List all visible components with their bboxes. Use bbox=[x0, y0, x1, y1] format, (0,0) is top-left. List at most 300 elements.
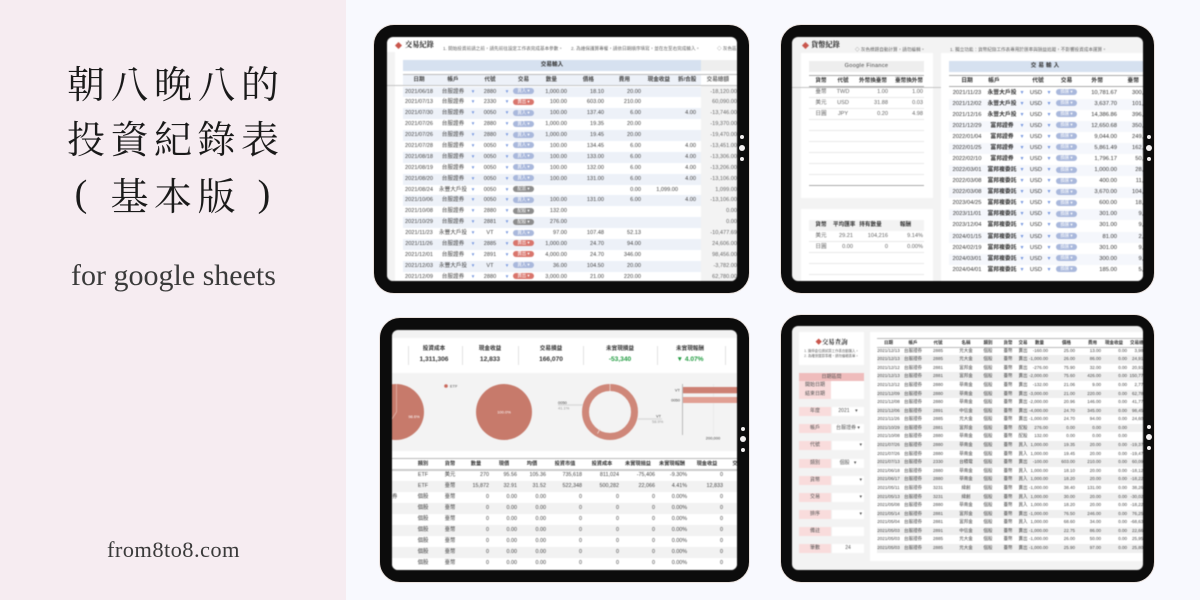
transaction table: 132.00 bbox=[587, 165, 604, 171]
transaction table: ▾ bbox=[1048, 134, 1050, 140]
transaction table: ▾ bbox=[472, 165, 474, 171]
transaction table: ▾ bbox=[1048, 189, 1050, 195]
results table: 買入 bbox=[1018, 494, 1028, 499]
panel: holdings bbox=[801, 209, 933, 281]
results table: 2021/05/14 bbox=[877, 511, 900, 516]
transaction table: ▾ bbox=[472, 230, 474, 236]
transaction table: 2021/08/20 bbox=[405, 176, 433, 182]
transaction table: 買入 bbox=[517, 132, 526, 137]
transaction table: 1,000.00 bbox=[545, 241, 567, 247]
transaction table: 2021/08/24 bbox=[405, 187, 433, 193]
white table area bbox=[392, 451, 737, 570]
results table: 0.00 bbox=[1118, 382, 1127, 387]
results table: 18.10 bbox=[1064, 468, 1075, 473]
results table: 賣出 bbox=[1018, 536, 1028, 541]
results table: 台服證券 bbox=[904, 528, 922, 533]
holdings table: 0 bbox=[652, 494, 655, 500]
transaction table: 1,000.00 bbox=[1094, 167, 1117, 173]
results table: 0.00 bbox=[1118, 519, 1127, 524]
results table: 臺幣 bbox=[1004, 365, 1012, 370]
results header: 代號 bbox=[934, 340, 942, 345]
transaction table: 買入 bbox=[517, 110, 526, 115]
chart: donut bbox=[558, 384, 664, 436]
holdings table: 0.00% bbox=[907, 244, 923, 250]
title: line 2: 紀 bbox=[154, 109, 192, 164]
transaction table: 2021/07/13 bbox=[405, 99, 433, 105]
results table: 個股 bbox=[984, 536, 992, 541]
transaction table: USD bbox=[1030, 123, 1042, 129]
transaction table: 0050 bbox=[484, 176, 496, 182]
transaction table: 20.00 bbox=[627, 132, 641, 138]
transaction table: 2021/10/08 bbox=[405, 208, 433, 214]
transaction table: USD bbox=[1030, 167, 1042, 173]
tablet: transaction record bbox=[373, 24, 750, 294]
results table: 台服證券 bbox=[904, 373, 922, 378]
transaction table: ▾ bbox=[506, 176, 508, 182]
results table: 富邦金 bbox=[959, 365, 973, 370]
results table: 0.00 bbox=[1118, 425, 1127, 430]
transaction table: 富邦證券 bbox=[990, 134, 1014, 140]
transaction table: 6.00 bbox=[630, 110, 641, 116]
transaction table: 換匯 bbox=[1060, 155, 1069, 160]
results table: 富邦金 bbox=[959, 511, 973, 516]
left panel: title block bbox=[0, 0, 346, 600]
notes bbox=[804, 348, 859, 358]
transaction table: 1,796.17 bbox=[1094, 156, 1117, 162]
results table: 24.70 bbox=[1064, 416, 1075, 421]
results table: 25.00 bbox=[1064, 348, 1075, 353]
filter: date range: 結束日期 bbox=[805, 391, 825, 397]
holdings table: 0 bbox=[720, 560, 723, 566]
holdings table: 貨幣 bbox=[815, 222, 827, 228]
results table: 34.00 bbox=[1090, 519, 1101, 524]
transaction table: 富邦證券 bbox=[990, 156, 1014, 162]
transaction table: -13,106.00 bbox=[710, 197, 737, 203]
results table: 中信金 bbox=[959, 408, 973, 413]
results table: 86.00 bbox=[1090, 528, 1101, 533]
results table: 台服證券 bbox=[904, 425, 922, 430]
results table: 個股 bbox=[984, 459, 992, 464]
transaction table: 4,000.00 bbox=[545, 252, 567, 258]
results table: 2021/11/26 bbox=[877, 416, 900, 421]
results table: 2021/05/04 bbox=[877, 519, 900, 524]
transaction table: 100.00 bbox=[550, 154, 567, 160]
transaction table: ▾ bbox=[472, 219, 474, 225]
transaction table: ▾ bbox=[506, 121, 508, 127]
transaction table: 0050 bbox=[484, 143, 496, 149]
transaction table: 300.00 bbox=[1099, 256, 1117, 262]
transaction table: ▾ bbox=[472, 274, 474, 280]
holdings table: 0.00% bbox=[672, 538, 687, 544]
transaction table: 換匯 bbox=[1060, 122, 1069, 127]
transaction table: 4.00 bbox=[685, 176, 696, 182]
results table: 26.00 bbox=[1064, 356, 1075, 361]
results header: 費用 bbox=[1088, 340, 1097, 345]
transaction table: USD bbox=[1030, 156, 1042, 162]
results table: 68.60 bbox=[1064, 519, 1075, 524]
transaction table: 1,000.00 bbox=[545, 88, 567, 94]
holdings table: 0 bbox=[720, 504, 723, 510]
holdings table: 0 bbox=[720, 472, 723, 478]
results table: 0.00 bbox=[1118, 373, 1127, 378]
results table: 2021/12/13 bbox=[877, 356, 900, 361]
results table: 緯創 bbox=[962, 485, 970, 490]
results table: 345.00 bbox=[1087, 408, 1101, 413]
holdings table: 0.00 bbox=[506, 516, 517, 522]
results table: 買入 bbox=[1018, 476, 1028, 481]
title: line 3 bbox=[75, 166, 270, 221]
title: line 2: 表 bbox=[241, 109, 279, 164]
transaction table: 換匯 bbox=[1060, 233, 1069, 238]
transaction table: 5,861.49 bbox=[1094, 145, 1117, 151]
transaction table: 100.00 bbox=[550, 176, 567, 182]
transaction table: 0050 bbox=[484, 165, 496, 171]
chart: donut: 58.9% bbox=[652, 419, 664, 424]
transaction table: 富邦證券 bbox=[990, 145, 1014, 151]
results table: 賣出 bbox=[1018, 528, 1028, 533]
transaction table: ▾ bbox=[506, 208, 508, 214]
transaction table: 2024/02/19 bbox=[952, 245, 982, 251]
filter: sort: 排序 bbox=[810, 511, 820, 517]
results table: -1,000.00 bbox=[1029, 536, 1048, 541]
results table: 台服證券 bbox=[904, 502, 922, 507]
holdings table: 個股 bbox=[418, 548, 428, 554]
holdings table: 美元 bbox=[815, 233, 827, 239]
transaction table: 2021/12/29 bbox=[952, 123, 982, 129]
holdings table: 0 bbox=[486, 516, 489, 522]
holdings table: 臺幣 bbox=[445, 560, 455, 566]
results table: 2880 bbox=[933, 451, 943, 456]
results table: 賣出 bbox=[1018, 416, 1028, 421]
camera dots: tablet 3 bbox=[740, 427, 746, 452]
results table: 2880 bbox=[933, 433, 943, 438]
results table: 76.50 bbox=[1064, 511, 1075, 516]
results table: 買入 bbox=[1018, 519, 1028, 524]
results table: 2021/12/13 bbox=[877, 348, 900, 353]
results table: 2021/12/12 bbox=[877, 382, 900, 387]
holdings table: 美元 bbox=[445, 472, 455, 478]
filter: account: 台服證券 ▾ bbox=[836, 425, 860, 431]
holdings table: 0.00% bbox=[672, 504, 687, 510]
results table: 0.00 bbox=[1118, 433, 1127, 438]
table header: 均價 bbox=[527, 461, 537, 467]
tablet: transaction query bbox=[780, 314, 1155, 583]
transaction table: VT bbox=[486, 230, 494, 236]
transaction header: 帳戶 bbox=[988, 78, 1000, 84]
transaction table: 永豐大戶投 bbox=[988, 90, 1016, 96]
transaction table: ▾ bbox=[472, 88, 474, 94]
rate table header bbox=[808, 76, 924, 88]
screen: transaction query bbox=[792, 326, 1143, 570]
results table: 131.00 bbox=[1087, 485, 1101, 490]
results table: 2021/12/09 bbox=[877, 391, 900, 396]
rate table: 31.88 bbox=[874, 100, 888, 106]
transaction table: -13,451.00 bbox=[710, 143, 737, 149]
results table: 臺幣 bbox=[1004, 348, 1012, 353]
holdings table: 0.00% bbox=[672, 560, 687, 566]
chart: pie 1 bbox=[368, 384, 424, 440]
transaction table: 0050 bbox=[484, 110, 496, 116]
transaction table: USD bbox=[1030, 267, 1042, 273]
chart: horizontal bars: 0050 bbox=[671, 398, 681, 402]
results table: -1,000.00 bbox=[1029, 416, 1048, 421]
results table: 臺幣 bbox=[1004, 425, 1012, 430]
results table: 2021/10/08 bbox=[877, 433, 900, 438]
results table: 0.00 bbox=[1066, 433, 1075, 438]
results table: 20.00 bbox=[1090, 451, 1101, 456]
transaction table: ▾ bbox=[1048, 245, 1050, 251]
transaction table: 100.00 bbox=[550, 143, 567, 149]
results table: 2021/12/12 bbox=[877, 365, 900, 370]
holdings table: 臺幣 bbox=[445, 482, 455, 488]
chart: horizontal bars bbox=[671, 384, 737, 440]
transaction table: 0.00 bbox=[726, 219, 737, 225]
filter: account: 帳戶 bbox=[810, 425, 820, 431]
results table: 2880 bbox=[933, 502, 943, 507]
header rule bbox=[949, 75, 1143, 76]
results table: 1,000.00 bbox=[1030, 468, 1048, 473]
transaction table: 富邦複委託 bbox=[988, 245, 1016, 251]
results table: 個股 bbox=[984, 348, 992, 353]
transaction table: ▾ bbox=[506, 154, 508, 160]
results table: 94.00 bbox=[1090, 416, 1101, 421]
results table: 0.00 bbox=[1118, 468, 1127, 473]
header rule bbox=[392, 458, 737, 459]
transaction table: 98,456.00 bbox=[712, 252, 737, 258]
tablet: currency record bbox=[780, 24, 1155, 294]
stat: unrealized return: ▼ 4.07% bbox=[676, 356, 704, 363]
transaction table: 換匯 bbox=[1060, 100, 1069, 105]
holdings table: 0 bbox=[486, 538, 489, 544]
transaction table: 賣出 bbox=[517, 240, 526, 245]
transaction table: 台服證券 bbox=[442, 241, 464, 247]
transaction table: 2885 bbox=[484, 241, 496, 247]
results table: -1,000.00 bbox=[1029, 528, 1048, 533]
transaction table: 133.00 bbox=[587, 154, 604, 160]
transaction table: ▾ bbox=[1021, 267, 1023, 273]
holdings table: 0.00 bbox=[536, 494, 546, 500]
results table: 台服證券 bbox=[904, 519, 922, 524]
results table: 2021/12/08 bbox=[877, 399, 900, 404]
results table: 華南金 bbox=[959, 433, 973, 438]
results table: 3231 bbox=[933, 494, 943, 499]
stat: unrealized gain bbox=[606, 344, 634, 363]
results table: 臺幣 bbox=[1004, 408, 1012, 413]
holdings table: 臺幣 bbox=[445, 526, 455, 532]
holdings table: 0.00 bbox=[536, 504, 546, 510]
results header: 日期 bbox=[884, 340, 893, 345]
holdings table: 0.00 bbox=[536, 526, 546, 532]
filter: date range bbox=[799, 373, 864, 399]
transaction table: 1,000.00 bbox=[545, 121, 567, 127]
transaction table: ▾ bbox=[1021, 222, 1023, 228]
results table: 個股 bbox=[984, 519, 992, 524]
results table: -160.00 bbox=[1033, 348, 1048, 353]
transaction table: 94.00 bbox=[627, 241, 641, 247]
left strip bbox=[387, 52, 395, 281]
holdings table: 0 bbox=[486, 560, 489, 566]
transaction table: 21.00 bbox=[590, 274, 604, 280]
transaction table: ▾ bbox=[506, 274, 508, 280]
transaction table: 2880 bbox=[484, 88, 496, 94]
transaction header: 交易 bbox=[1061, 78, 1072, 84]
heading: 貨幣紀錄 bbox=[811, 40, 840, 50]
transaction table: -18,120.00 bbox=[710, 88, 737, 94]
filter: note bbox=[799, 526, 864, 536]
transaction table: ▾ bbox=[506, 187, 508, 193]
transaction table: 14,386.86 bbox=[1091, 112, 1117, 118]
holdings table: -9.30% bbox=[670, 472, 687, 478]
transaction table: 301.00 bbox=[1099, 211, 1117, 217]
results table: 緯創 bbox=[962, 494, 970, 499]
holdings table: 0 bbox=[720, 526, 723, 532]
results table: 元大金 bbox=[959, 348, 973, 353]
results table: 2021/12/06 bbox=[877, 408, 900, 413]
table header: 現金收益 bbox=[697, 461, 717, 467]
holdings table: 0 bbox=[616, 538, 619, 544]
transaction table: 3,637.70 bbox=[1094, 101, 1117, 107]
transaction table: ▾ bbox=[506, 230, 508, 236]
transaction table bbox=[950, 88, 1144, 273]
results table: -1,000.00 bbox=[1029, 356, 1048, 361]
results table: 50.00 bbox=[1090, 536, 1101, 541]
results table: 2021/05/03 bbox=[877, 536, 900, 541]
results table: 富邦金 bbox=[959, 519, 973, 524]
transaction table: ▾ bbox=[472, 110, 474, 116]
results table: 2880 bbox=[933, 382, 943, 387]
results header: 價格 bbox=[1062, 340, 1071, 345]
results table: 2881 bbox=[933, 373, 943, 378]
transaction table: 2021/12/09 bbox=[405, 274, 433, 280]
notes: 1. 選停倉位請試算工作表自動匯入。 bbox=[804, 349, 859, 353]
stat: cash income bbox=[478, 344, 502, 363]
results table: 9.00 bbox=[1092, 382, 1101, 387]
transaction table: 2021/07/28 bbox=[405, 143, 433, 149]
results table: 富邦金 bbox=[959, 373, 973, 378]
holdings table: 0 bbox=[616, 526, 619, 532]
transaction table: 買入 bbox=[517, 262, 526, 267]
results table: 2885 bbox=[933, 348, 943, 353]
title: line 2: 錄 bbox=[197, 109, 236, 164]
transaction table: 0050 bbox=[484, 154, 496, 160]
results table: 臺幣 bbox=[1004, 485, 1012, 490]
results table: 華南金 bbox=[959, 502, 973, 507]
results table: 0.00 bbox=[1118, 485, 1127, 490]
transaction table: 6.00 bbox=[630, 154, 641, 160]
chart: pie 2 bbox=[476, 384, 532, 440]
results table: -1,000.00 bbox=[1029, 485, 1048, 490]
results table: 0.00 bbox=[1118, 476, 1127, 481]
results table: 13.00 bbox=[1090, 348, 1101, 353]
note 1: ◇ 灰色標題自動計算，請勿編輯。 bbox=[855, 47, 925, 52]
holdings table: 持有數量 bbox=[859, 222, 882, 228]
results table: 元大金 bbox=[959, 545, 973, 550]
transaction table: ▾ bbox=[1048, 156, 1050, 162]
transaction table: ▾ bbox=[506, 197, 508, 203]
transaction table: ▾ bbox=[1048, 200, 1050, 206]
holdings table: 0.00 bbox=[506, 548, 517, 554]
transaction table: ▾ bbox=[506, 88, 508, 94]
title: line 3: ) bbox=[258, 173, 270, 215]
holdings table: 臺幣 bbox=[445, 516, 455, 522]
results table: 個股 bbox=[984, 382, 992, 387]
holdings table: 0 bbox=[720, 494, 723, 500]
transaction table: ▾ bbox=[1021, 256, 1023, 262]
charts bbox=[391, 383, 738, 441]
results table: 2885 bbox=[933, 536, 943, 541]
transaction table: 301.00 bbox=[1099, 245, 1117, 251]
stat: invested cost: 投資成本 bbox=[423, 346, 445, 352]
filter: year bbox=[799, 406, 864, 416]
results table: 買入 bbox=[1018, 502, 1028, 507]
transaction table: 富邦複委託 bbox=[988, 222, 1016, 228]
filter: trade bbox=[799, 492, 864, 502]
results table: 1,000.00 bbox=[1030, 494, 1048, 499]
holdings table: 9.14% bbox=[907, 233, 923, 239]
results table: 個股 bbox=[984, 511, 992, 516]
transaction table: USD bbox=[1030, 101, 1042, 107]
results table: 3231 bbox=[933, 485, 943, 490]
rate table: 美元 bbox=[815, 100, 827, 106]
transaction table: ▾ bbox=[1048, 101, 1050, 107]
transaction table: 台服證券 bbox=[442, 197, 464, 203]
table header: 數量 bbox=[471, 461, 481, 467]
title: line 1: 晚 bbox=[154, 54, 192, 109]
holdings table: 0.00% bbox=[672, 516, 687, 522]
results table: 0.00 bbox=[1118, 536, 1127, 541]
transaction table: 換匯 bbox=[1060, 244, 1069, 249]
freeze line bbox=[792, 86, 941, 88]
transaction table: 台服證券 bbox=[442, 99, 464, 105]
results table: 2021/10/29 bbox=[877, 425, 900, 430]
table header: 未實現報酬 bbox=[659, 461, 685, 467]
results table: 臺幣 bbox=[1004, 433, 1012, 438]
transaction table: 276.00 bbox=[550, 219, 567, 225]
transaction table: 換匯 bbox=[1060, 189, 1069, 194]
band: Google Finance: Google Finance bbox=[845, 63, 888, 69]
results table: 2021/12/13 bbox=[877, 373, 900, 378]
transaction table: USD bbox=[1030, 145, 1042, 151]
transaction table: 2880 bbox=[484, 121, 496, 127]
transaction table: 18.10 bbox=[590, 88, 604, 94]
results table: 台服證券 bbox=[904, 416, 922, 421]
transaction table: 81.00 bbox=[1102, 234, 1117, 240]
transaction table: ▾ bbox=[1048, 234, 1050, 240]
results table: 220.00 bbox=[1087, 391, 1101, 396]
transaction table: -13,106.00 bbox=[710, 176, 737, 182]
transaction table: 富邦複委託 bbox=[988, 200, 1016, 206]
transaction table: -19,370.00 bbox=[710, 121, 737, 127]
chart: horizontal bars: 200,000 bbox=[706, 436, 721, 440]
transaction table: 配息 bbox=[517, 186, 526, 191]
holdings table: 0 bbox=[486, 526, 489, 532]
results table: 富邦金 bbox=[959, 425, 973, 430]
transaction table: ▾ bbox=[1021, 167, 1023, 173]
results table: 賣出 bbox=[1018, 356, 1028, 361]
title: line 3: 本 bbox=[154, 166, 192, 221]
results table: 20.00 bbox=[1090, 442, 1101, 447]
holdings table: -75,406 bbox=[637, 472, 655, 478]
transaction table: 131.00 bbox=[587, 197, 604, 203]
rate table: 臺幣 bbox=[815, 89, 827, 95]
results table: 臺幣 bbox=[1004, 373, 1012, 378]
transaction table: 2021/07/26 bbox=[405, 132, 433, 138]
screen: dashboard bbox=[392, 330, 737, 570]
transaction table: 2021/08/18 bbox=[405, 154, 433, 160]
filter: count: 筆數 bbox=[810, 545, 820, 551]
results table: 0.00 bbox=[1118, 391, 1127, 396]
holdings table: 15,872 bbox=[472, 482, 489, 488]
